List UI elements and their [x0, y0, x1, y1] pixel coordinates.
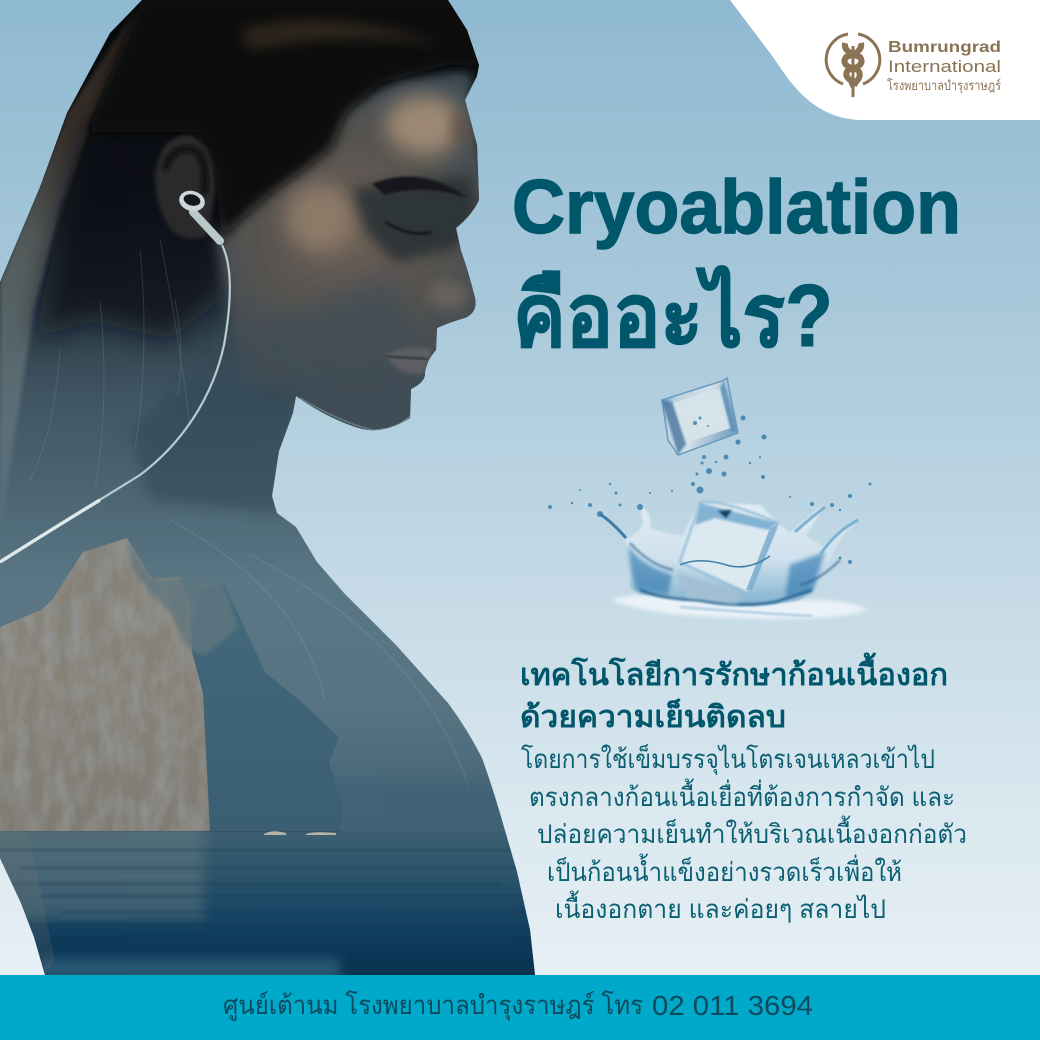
earbud head — [177, 188, 207, 214]
body line 3: ปล่อยความเย็นทำให้บริเวณเนื้องอกก่อตัว — [537, 815, 967, 849]
puddle streak — [680, 607, 812, 616]
water droplets — [548, 416, 872, 564]
nose light — [428, 281, 468, 309]
sea — [0, 831, 535, 975]
iceberg — [0, 538, 343, 831]
eyebrow — [372, 177, 468, 198]
body line 4: เป็นก้อนน้ำแข็งอย่างรวดเร็วเพื่อให้ — [547, 853, 902, 887]
splash dark fold — [630, 543, 840, 585]
horizon line — [0, 831, 340, 832]
chin highlight — [300, 398, 410, 430]
eye shadow — [352, 175, 478, 262]
rough ridge mix — [127, 538, 238, 655]
splash arm left — [600, 514, 626, 538]
face skin — [216, 70, 490, 436]
title line 2: คืออะไร? — [513, 266, 833, 365]
earbud stem — [193, 212, 220, 241]
hair strands — [30, 240, 190, 490]
cheek and jaw shadow — [266, 273, 412, 430]
logo thai name: โรงพยาบาลบำรุงราษฎร์ — [887, 78, 1001, 94]
title — [512, 165, 961, 365]
forehead highlight — [385, 95, 465, 155]
body text — [521, 743, 967, 924]
left arm overlap — [0, 831, 55, 974]
subheading — [520, 652, 948, 734]
body line 5: เนื้องอกตาย และค่อยๆ สลายไป — [555, 890, 886, 924]
title line 1: Cryoablation — [512, 165, 961, 250]
subheading line 2: ด้วยความเย็นติดลบ — [520, 698, 786, 734]
puddle — [610, 595, 868, 619]
horizon haze — [466, 778, 507, 837]
iceberg shaded face — [188, 583, 343, 831]
body line 2: ตรงกลางก้อนเนื้อเยื่อที่ต้องการกำจัด และ — [529, 778, 955, 812]
splash crown — [624, 502, 858, 606]
body line 1: โดยการใช้เข็มบรรจุไนโตรเจนเหลวเข้าไป — [521, 743, 935, 775]
iceberg texture — [0, 538, 210, 831]
hair over forehead — [88, 0, 484, 240]
iceberg lit face — [0, 538, 210, 831]
closed eye — [385, 222, 432, 234]
logo name: Bumrungrad — [888, 39, 1001, 56]
hair shine — [240, 20, 445, 50]
splash arm right — [795, 507, 858, 555]
temple shadow — [451, 110, 469, 146]
footer bar — [0, 975, 1040, 1040]
earphone and cable — [0, 188, 230, 562]
splash shadows — [628, 545, 825, 598]
lips — [384, 347, 432, 375]
logo — [826, 34, 1001, 97]
submerged ice — [676, 572, 745, 604]
waterline — [680, 556, 770, 567]
left hair edge strip — [0, 8, 138, 500]
logo subname: International — [888, 57, 1001, 76]
iceberg reflection — [0, 820, 204, 920]
ear — [155, 135, 215, 239]
turtleneck — [130, 375, 296, 513]
woman silhouette double exposure photo — [0, 0, 540, 982]
ripples — [1, 848, 516, 912]
footer contact text: ศูนย์เต้านม โรงพยาบาลบำรุงราษฎร์ โทร — [223, 990, 643, 1021]
cube blue shade — [695, 503, 778, 530]
falling ice cube — [662, 378, 738, 455]
small ice floes — [264, 831, 336, 835]
ice cubes and water splash — [548, 378, 872, 619]
body and hair base — [0, 0, 540, 975]
splash base line — [640, 590, 812, 605]
cheek highlight — [286, 184, 354, 252]
dark hair behind ear — [35, 130, 240, 340]
white corner logo panel — [730, 0, 1040, 120]
logo mark: ring and staff — [826, 34, 880, 97]
footer phone number: 02 011 3694 — [652, 990, 813, 1021]
subheading line 1: เทคโนโลยีการรักษาก้อนเนื้องอก — [520, 652, 948, 692]
lower ice cube — [680, 502, 778, 593]
shoulder wave highlight — [170, 520, 470, 790]
lower teal band — [40, 954, 344, 975]
cable — [0, 245, 230, 562]
